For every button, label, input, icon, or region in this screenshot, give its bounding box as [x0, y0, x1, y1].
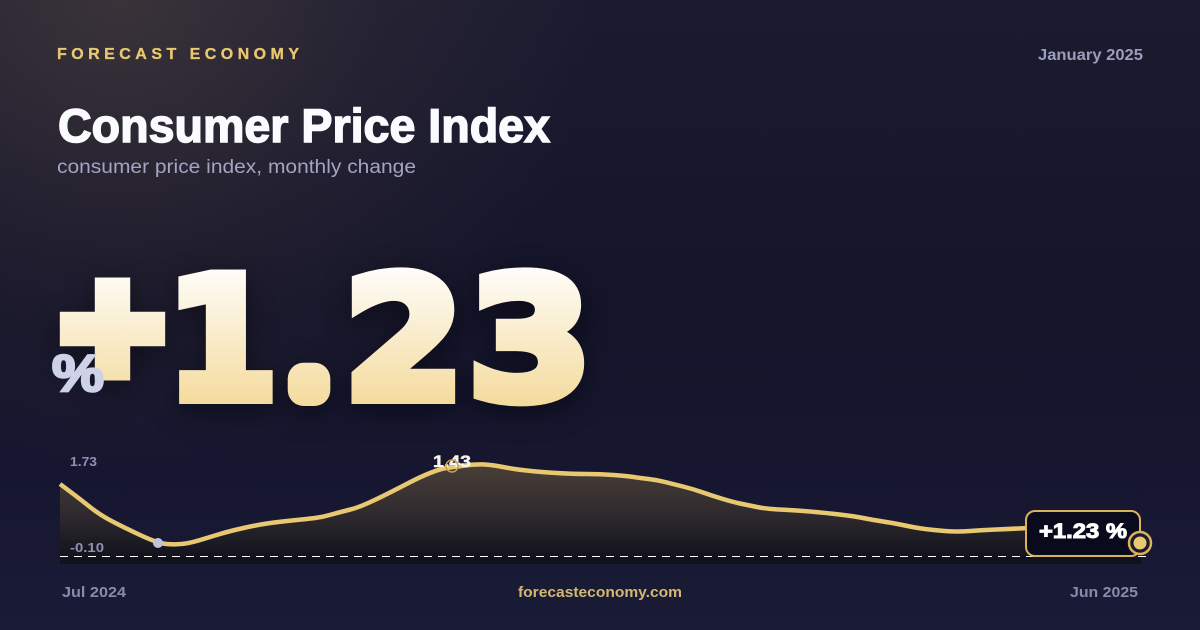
percent sign: % — [52, 345, 104, 403]
peak marker — [446, 460, 458, 472]
low point marker — [153, 538, 163, 548]
min label: -0.10 — [70, 540, 104, 555]
brand label: FORECAST ECONOMY — [57, 46, 299, 63]
big value: 3 — [468, 242, 592, 438]
big value: . — [298, 335, 320, 405]
trend line — [60, 464, 1027, 544]
subtitle: consumer price index, monthly change — [57, 157, 416, 178]
current value callout: +1.23 % — [1039, 520, 1127, 543]
big value — [55, 242, 592, 438]
zero baseline — [60, 556, 1146, 558]
website: forecasteconomy.com — [518, 584, 682, 601]
peak value label: 1.43 — [433, 452, 471, 471]
date: January 2025 — [1038, 47, 1143, 64]
start date: Jul 2024 — [62, 584, 127, 601]
big value: + — [55, 247, 170, 403]
end date: Jun 2025 — [1070, 584, 1138, 601]
end point marker — [1129, 532, 1151, 554]
current value callout — [1026, 511, 1140, 556]
title: Consumer Price Index — [58, 99, 550, 152]
area fill — [60, 464, 1141, 564]
big value: 1 — [166, 242, 278, 438]
chart — [60, 452, 1151, 564]
big value: 2 — [344, 242, 464, 438]
max label: 1.73 — [70, 454, 97, 469]
